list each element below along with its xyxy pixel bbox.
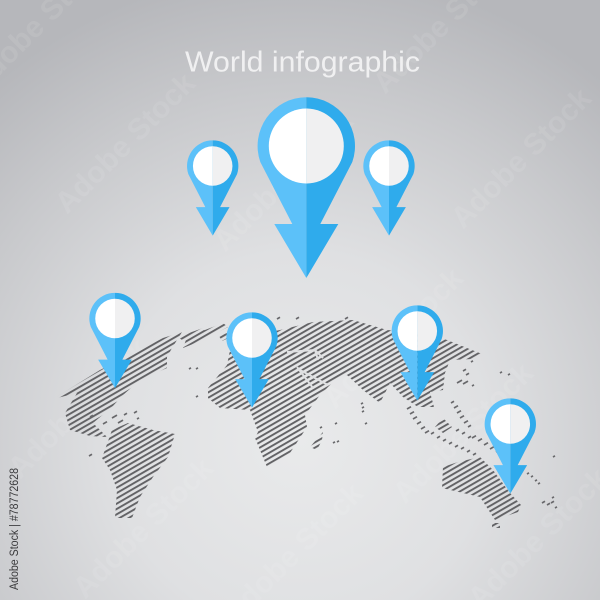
Tasmania bbox=[492, 523, 500, 528]
small pin left bbox=[187, 140, 238, 236]
Greenland bbox=[178, 323, 228, 348]
Australia bbox=[442, 457, 521, 520]
large pin bbox=[258, 97, 355, 278]
Borneo bbox=[435, 418, 452, 433]
watermarks: Adobe Stock bbox=[207, 105, 360, 258]
Eurasia and Africa bbox=[208, 320, 482, 467]
small pin right bbox=[363, 140, 415, 236]
watermarks: Adobe Stock bbox=[387, 357, 540, 510]
pin: Asia bbox=[392, 305, 443, 401]
South America bbox=[102, 423, 175, 518]
Iceland sliver bbox=[219, 331, 235, 341]
watermarks: Adobe Stock bbox=[445, 82, 598, 235]
pin: Africa bbox=[226, 312, 278, 408]
watermarks: Adobe Stock bbox=[317, 262, 470, 415]
pin: Australia bbox=[485, 398, 536, 494]
world map bbox=[53, 320, 521, 528]
title: World infographic bbox=[185, 46, 420, 78]
inland seas on map bbox=[287, 350, 328, 388]
small islands as short dashes bbox=[89, 317, 557, 508]
pins above map bbox=[187, 97, 415, 278]
pin: North America bbox=[89, 293, 141, 388]
pins on map bbox=[89, 293, 536, 494]
stock id side label: Adobe Stock | #78772628 bbox=[9, 468, 21, 590]
watermarks: Adobe Stock bbox=[2, 332, 155, 485]
watermarks: Adobe Stock bbox=[49, 67, 202, 220]
North America bbox=[53, 332, 182, 437]
Madagascar bbox=[310, 432, 323, 450]
